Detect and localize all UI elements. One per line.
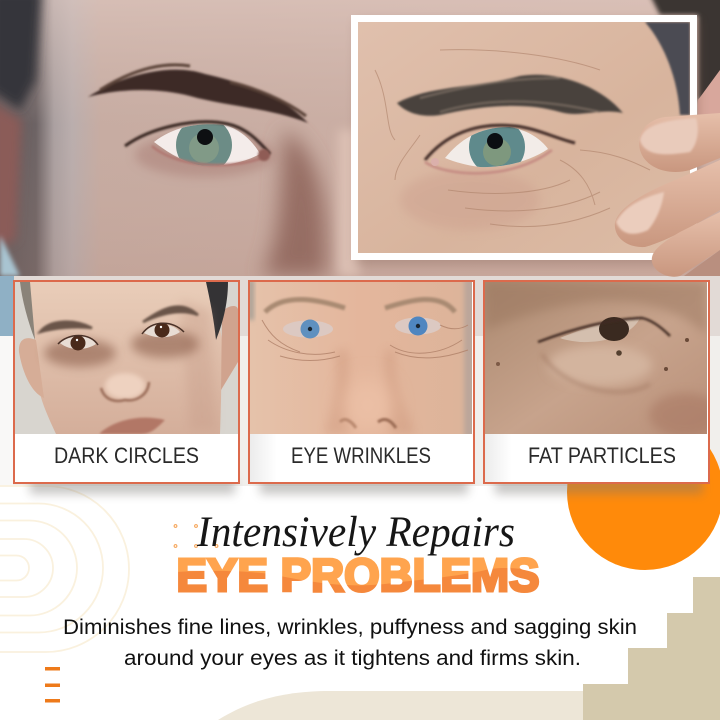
dark circles bbox=[44, 339, 116, 367]
body text bbox=[63, 616, 637, 670]
eye socket shade bbox=[135, 133, 275, 177]
beige stairs bbox=[583, 577, 720, 720]
lips bbox=[100, 418, 165, 434]
eyebrow bbox=[397, 75, 623, 116]
card: fat particles bbox=[484, 281, 720, 483]
eyes bbox=[60, 336, 96, 349]
heading: Intensively Repairs: Intensively Repairs bbox=[196, 509, 515, 556]
eyes bbox=[283, 320, 333, 338]
label: fat particles: FAT PARTICLES bbox=[528, 443, 676, 468]
hand: fingers over frame bbox=[615, 113, 720, 277]
nose shadow bbox=[327, 352, 349, 434]
wrinkles bbox=[375, 50, 650, 227]
under-eye shade bbox=[404, 174, 534, 226]
brows bbox=[40, 322, 92, 332]
eye bbox=[445, 127, 548, 168]
beige mound bbox=[218, 691, 600, 720]
hair and temple bbox=[0, 0, 42, 276]
label: dark circles: DARK CIRCLES bbox=[54, 443, 199, 468]
wrinkles bbox=[262, 320, 468, 360]
nostril bbox=[378, 420, 396, 428]
photo: wrinkled face bbox=[248, 278, 476, 438]
card shadows bbox=[30, 478, 703, 494]
photo: dark circles face bbox=[15, 282, 238, 434]
nose shadow bbox=[262, 130, 327, 276]
top right: dark hair and hand background bbox=[650, 0, 720, 120]
orange dashes bbox=[45, 667, 60, 702]
label: eye wrinkles: EYE WRINKLES bbox=[291, 443, 431, 468]
orange circle bbox=[567, 414, 720, 570]
card: eye wrinkles bbox=[248, 278, 476, 483]
body text: Diminishes fine lines, wrinkles, puffyness and sagging skin bbox=[63, 616, 637, 639]
top photo: young eye bbox=[0, 0, 720, 276]
card: dark circles bbox=[14, 281, 239, 483]
photo: under-eye bag bbox=[485, 282, 720, 437]
brows bbox=[265, 299, 345, 312]
background: concentric pill outlines bbox=[0, 486, 129, 652]
nose bbox=[105, 373, 145, 399]
photo frame: aged eye bbox=[351, 15, 700, 265]
eyebrow bbox=[88, 65, 308, 123]
decorative dots bbox=[174, 525, 218, 547]
body text: around your eyes as it tightens and firms skin. bbox=[124, 647, 581, 670]
heading: EYE PROBLEMS: EYE PROBLEMS bbox=[176, 549, 540, 601]
eye bbox=[123, 118, 272, 167]
backdrop strip behind cards bbox=[0, 272, 720, 486]
